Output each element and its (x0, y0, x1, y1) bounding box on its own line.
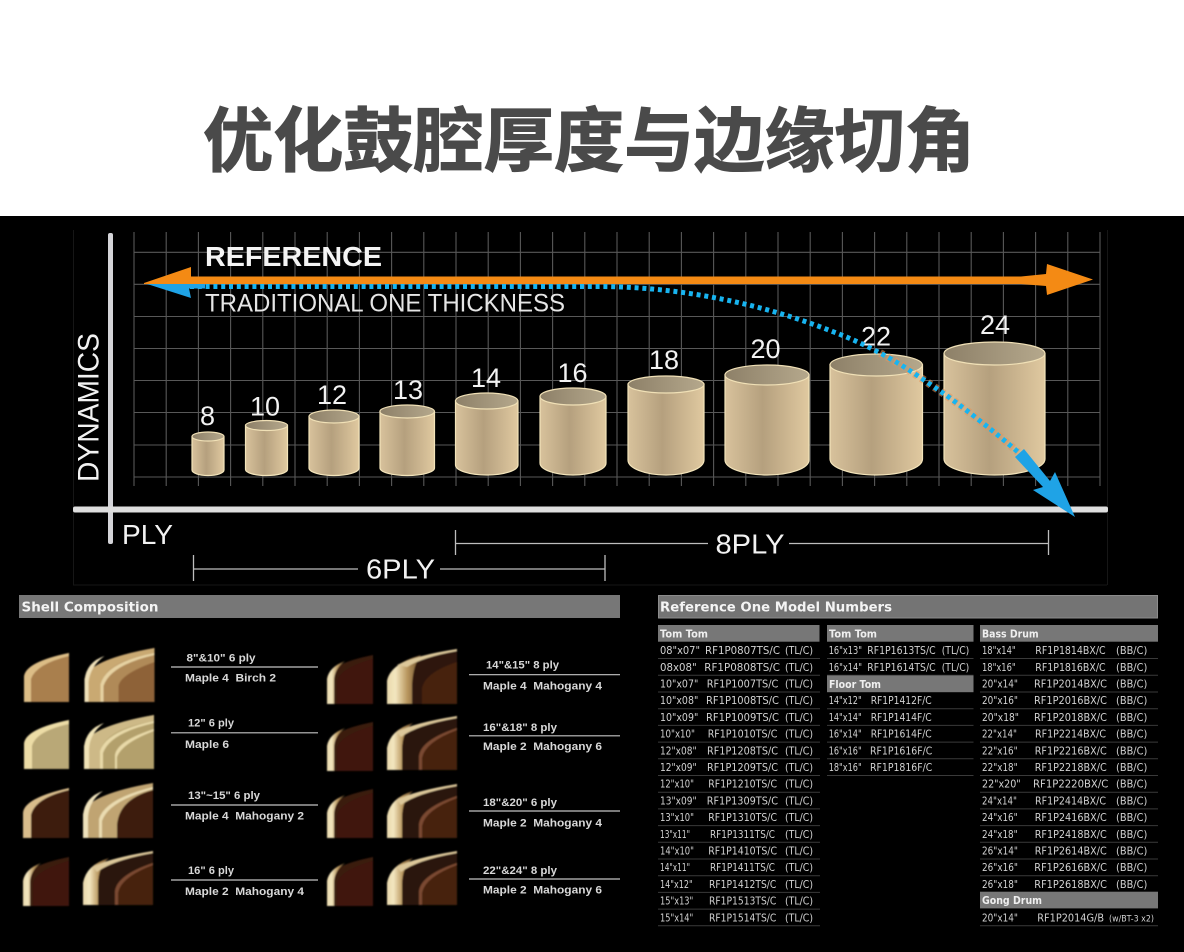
axis: dynamics (108, 233, 113, 544)
table column: tom tom sizes 08 to 15: RF1P1209TS/C (707, 762, 778, 774)
table column: tom tom sizes 08 to 15: 14"x11" (660, 862, 690, 874)
table column: tom tom sizes 08 to 15: RF1P1411TS/C (710, 862, 775, 874)
drum 18 (628, 345, 704, 475)
shell label: 16 and 18 inch: Maple 2 Mahogany 6 (483, 741, 602, 753)
table column: tom tom sizes 08 to 15: (TL/C) (785, 712, 813, 724)
table column: tom tom sizes 08 to 15: 13"x11" (660, 829, 690, 841)
table column: bass drum and gong drum: 26"x18" (982, 879, 1018, 891)
table column: tom tom sizes 08 to 15: RF1P1210TS/C (708, 779, 777, 791)
table column: tom tom sizes 08 to 15 (658, 625, 820, 926)
table column: tom tom 16 and floor tom: RF1P1414F/C (871, 712, 932, 724)
table column: bass drum and gong drum: 22"x16" (982, 745, 1018, 757)
table column: tom tom 16 and floor tom: 16"x14" (829, 662, 862, 674)
table column: bass drum and gong drum: (BB/C) (1116, 795, 1147, 807)
table column: tom tom 16 and floor tom: Floor Tom (829, 678, 881, 691)
shell thumbnails: 8 and 10 inch (24, 648, 154, 702)
table column: tom tom sizes 08 to 15: 10"x08" (660, 695, 698, 707)
table column: tom tom 16 and floor tom: 16"x16" (829, 745, 862, 757)
table column: tom tom sizes 08 to 15: 12"x08" (660, 745, 697, 757)
table column: bass drum and gong drum: 24"x14" (982, 795, 1017, 807)
drum 24: 24 (980, 310, 1010, 340)
shell thumbnails: 18 and 20 inch (327, 784, 457, 838)
table column: bass drum and gong drum: (BB/C) (1116, 879, 1147, 891)
table column: tom tom sizes 08 to 15: RF1P1208TS/C (707, 745, 778, 757)
table column: tom tom 16 and floor tom: RF1P1613TS/C (867, 645, 936, 657)
table column: bass drum and gong drum: (BB/C) (1116, 729, 1147, 741)
table column: bass drum and gong drum: (BB/C) (1116, 862, 1147, 874)
table column: tom tom sizes 08 to 15: RF1P1410TS/C (708, 846, 777, 858)
table column: bass drum and gong drum: 24"x16" (982, 812, 1018, 824)
table column: bass drum and gong drum: RF1P2016BX/C (1034, 695, 1107, 707)
table column: tom tom sizes 08 to 15: RF1P1311TS/C (710, 829, 775, 841)
table column: bass drum and gong drum: (BB/C) (1116, 712, 1147, 724)
shell label: 13 to 15 inch: Maple 4 Mahogany 2 (185, 810, 304, 822)
drum 14 (456, 363, 518, 475)
heading bar: model numbers: Reference One Model Numbers (660, 600, 892, 616)
chart: dynamics by ply (72, 230, 1108, 585)
table column: tom tom sizes 08 to 15: 10"x07" (660, 678, 698, 690)
table column: tom tom 16 and floor tom (827, 625, 974, 776)
shell label: 16 inch: 16" 6 ply (188, 865, 235, 877)
panel: shell composition (19, 595, 620, 906)
title: 优化鼓腔厚度与边缘切角 (203, 102, 975, 180)
shell label: 13 to 15 inch (171, 790, 318, 822)
table column: tom tom sizes 08 to 15: 15"x14" (660, 912, 693, 924)
shell thumbnails: 16 and 18 inch (327, 716, 457, 771)
table column: bass drum and gong drum: RF1P2214BX/C (1035, 729, 1106, 741)
shell label: 12 inch: 12" 6 ply (188, 718, 235, 730)
table column: bass drum and gong drum: (BB/C) (1116, 695, 1147, 707)
table column: bass drum and gong drum: Bass Drum (982, 628, 1039, 640)
table column: tom tom 16 and floor tom: (TL/C) (942, 662, 969, 674)
table column: tom tom sizes 08 to 15: RF1P1513TS/C (709, 896, 776, 908)
shell label: 12 inch: Maple 6 (185, 739, 229, 751)
table column: bass drum and gong drum: RF1P2414BX/C (1035, 795, 1106, 807)
table column: tom tom 16 and floor tom: 18"x16" (829, 762, 862, 774)
table column: tom tom 16 and floor tom: RF1P1816F/C (870, 762, 932, 774)
table column: tom tom sizes 08 to 15: (TL/C) (785, 762, 813, 774)
table column: tom tom sizes 08 to 15: 14"x12" (660, 879, 693, 891)
drum 14: 14 (471, 363, 501, 393)
drum 12 (309, 380, 359, 476)
table column: bass drum and gong drum: 22"x14" (982, 729, 1017, 741)
drum 20 (725, 334, 809, 475)
shell label: 16 and 18 inch: 16"&18" 8 ply (483, 722, 558, 734)
shell label: 14 and 15 inch: Maple 4 Mahogany 4 (483, 680, 603, 692)
arrow: traditional one thickness falling curve (144, 283, 1075, 517)
drum 12: 12 (317, 380, 347, 410)
table column: tom tom sizes 08 to 15: 13"x10" (660, 812, 694, 824)
shell thumbnails: 22 and 24 inch (327, 851, 457, 906)
table column: bass drum and gong drum: RF1P2614BX/C (1035, 846, 1107, 858)
drum 8: 8 (200, 401, 215, 431)
table column: tom tom sizes 08 to 15: (TL/C) (785, 662, 813, 674)
table column: tom tom sizes 08 to 15: (TL/C) (785, 729, 813, 741)
table column: tom tom sizes 08 to 15: 15"x13" (660, 896, 693, 908)
table column: tom tom sizes 08 to 15: RF1P0807TS/C (705, 645, 780, 657)
table column: tom tom sizes 08 to 15: (TL/C) (785, 896, 813, 908)
table column: bass drum and gong drum: (BB/C) (1116, 762, 1147, 774)
table column: tom tom sizes 08 to 15: RF1P0808TS/C (704, 662, 780, 674)
table column: tom tom sizes 08 to 15: 12"x09" (660, 762, 697, 774)
table column: bass drum and gong drum: 20"x14" (982, 912, 1018, 924)
drum 13 (380, 375, 435, 476)
table column: bass drum and gong drum: 18"x16" (982, 662, 1016, 674)
shell label: 16 inch (171, 865, 318, 898)
shell label: 13 to 15 inch: 13"~15" 6 ply (188, 790, 261, 802)
table column: tom tom sizes 08 to 15: RF1P1310TS/C (708, 812, 777, 824)
table column: bass drum and gong drum: RF1P2218BX/C (1035, 762, 1107, 774)
table column: bass drum and gong drum: 18"x14" (982, 645, 1016, 657)
shell label: 16 and 18 inch (469, 722, 620, 753)
shell thumbnails: 16 inch (23, 851, 153, 906)
shell thumbnails: 12 inch (24, 715, 154, 769)
table column: tom tom sizes 08 to 15: (TL/C) (785, 779, 813, 791)
table column: tom tom sizes 08 to 15: RF1P1008TS/C (706, 695, 779, 707)
table column: tom tom sizes 08 to 15: Tom Tom (660, 628, 708, 640)
bracket: 6 ply (194, 554, 605, 584)
shell label: 18 and 20 inch (469, 797, 620, 830)
table column: bass drum and gong drum: RF1P2018BX/C (1034, 712, 1107, 724)
table column: bass drum and gong drum: RF1P2216BX/C (1035, 745, 1107, 757)
table column: bass drum and gong drum: 24"x18" (982, 829, 1018, 841)
table column: bass drum and gong drum: RF1P2014G/B (1037, 912, 1104, 924)
drum 8 (192, 401, 224, 476)
table column: tom tom sizes 08 to 15: (TL/C) (785, 745, 813, 757)
axis label: ply: PLY (122, 519, 173, 550)
label: reference: REFERENCE (205, 241, 382, 272)
table column: bass drum and gong drum: (BB/C) (1116, 829, 1147, 841)
shell label: 14 and 15 inch (469, 660, 620, 692)
table column: bass drum and gong drum: (BB/C) (1116, 846, 1147, 858)
drum 10 (246, 392, 288, 476)
drum 22 (830, 322, 922, 475)
table column: tom tom 16 and floor tom: (TL/C) (942, 645, 969, 657)
shell label: 22 and 24 inch (469, 865, 620, 896)
axis: ply (73, 506, 1108, 512)
table column: tom tom sizes 08 to 15: (TL/C) (785, 862, 813, 874)
table column: tom tom sizes 08 to 15: (TL/C) (785, 678, 813, 690)
shell label: 16 inch: Maple 2 Mahogany 4 (185, 886, 305, 898)
table column: tom tom sizes 08 to 15: RF1P1514TS/C (709, 912, 776, 924)
table column: bass drum and gong drum: RF1P2618BX/C (1034, 879, 1107, 891)
arrow: reference flat response (144, 264, 1093, 295)
table column: bass drum and gong drum: (BB/C) (1116, 812, 1147, 824)
table column: tom tom sizes 08 to 15: RF1P1412TS/C (709, 879, 776, 891)
shell label: 8 and 10 inch: 8"&10" 6 ply (186, 652, 256, 664)
table column: bass drum and gong drum: 20"x18" (982, 712, 1019, 724)
drum 22: 22 (861, 322, 891, 352)
table column: bass drum and gong drum: 26"x16" (982, 862, 1018, 874)
table column: tom tom sizes 08 to 15: RF1P1007TS/C (707, 678, 778, 690)
table column: tom tom 16 and floor tom: 14"x12" (829, 695, 862, 707)
table column: tom tom sizes 08 to 15: 10"x09" (660, 712, 698, 724)
shell label: 18 and 20 inch: Maple 2 Mahogany 4 (483, 818, 603, 830)
table column: tom tom sizes 08 to 15: (TL/C) (785, 879, 813, 891)
drum 16: 16 (557, 358, 588, 388)
table column: tom tom sizes 08 to 15: 08x08" (660, 662, 697, 674)
table column: tom tom sizes 08 to 15: 12"x10" (660, 779, 694, 791)
drum 20: 20 (750, 334, 781, 364)
table column: tom tom sizes 08 to 15: (TL/C) (785, 829, 813, 841)
axis label: dynamics: DYNAMICS (72, 333, 106, 482)
table column: bass drum and gong drum: RF1P2220BX/C (1033, 779, 1108, 791)
bracket: 6 ply: 6PLY (366, 554, 435, 584)
table column: tom tom sizes 08 to 15: 10"x10" (660, 729, 695, 741)
shell thumbnails: 14 and 15 inch (327, 649, 457, 704)
table column: tom tom sizes 08 to 15: RF1P1309TS/C (707, 795, 778, 807)
table column: bass drum and gong drum: RF1P2616BX/C (1034, 862, 1107, 874)
table column: bass drum and gong drum: (w/BT-3 x2) (1109, 914, 1154, 924)
table column: tom tom 16 and floor tom: 16"x13" (829, 645, 862, 657)
label: traditional one thickness: TRADITIONAL ONE THICKNESS (205, 290, 565, 318)
table column: bass drum and gong drum (980, 625, 1158, 926)
table column: tom tom sizes 08 to 15: (TL/C) (785, 695, 813, 707)
drum 10: 10 (250, 392, 280, 422)
bracket: 8 ply (456, 528, 1048, 560)
table column: tom tom 16 and floor tom: RF1P1614TS/C (867, 662, 936, 674)
table column: tom tom sizes 08 to 15: (TL/C) (785, 846, 813, 858)
table column: bass drum and gong drum: 22"x18" (982, 762, 1018, 774)
table column: bass drum and gong drum: 20"x16" (982, 695, 1018, 707)
table column: tom tom sizes 08 to 15: RF1P1010TS/C (708, 729, 777, 741)
table column: tom tom 16 and floor tom: 16"x14" (829, 729, 862, 741)
shell thumbnails: 13 to 15 inch (23, 783, 153, 838)
shell label: 12 inch (171, 718, 318, 751)
shell label: 8 and 10 inch (171, 652, 318, 684)
table column: tom tom sizes 08 to 15: (TL/C) (785, 795, 813, 807)
table column: bass drum and gong drum: RF1P1816BX/C (1035, 662, 1106, 674)
table column: tom tom 16 and floor tom: RF1P1614F/C (871, 729, 932, 741)
table column: bass drum and gong drum: (BB/C) (1116, 745, 1147, 757)
drum 18: 18 (649, 345, 679, 375)
shell label: 8 and 10 inch: Maple 4 Birch 2 (185, 672, 276, 684)
drum 24 (944, 310, 1045, 475)
shell label: 22 and 24 inch: 22"&24" 8 ply (483, 865, 558, 877)
table column: tom tom 16 and floor tom: RF1P1616F/C (870, 745, 932, 757)
shell label: 14 and 15 inch: 14"&15" 8 ply (486, 660, 560, 672)
heading bar: model numbers (658, 596, 1158, 618)
table column: tom tom sizes 08 to 15: 13"x09" (660, 795, 697, 807)
bracket: 8 ply: 8PLY (716, 528, 785, 560)
table column: bass drum and gong drum: RF1P2014BX/C (1034, 678, 1107, 690)
heading bar: shell composition: Shell Composition (22, 600, 158, 616)
table column: tom tom 16 and floor tom: 14"x14" (829, 712, 862, 724)
table column: bass drum and gong drum: 20"x14" (982, 678, 1018, 690)
table column: tom tom sizes 08 to 15: (TL/C) (785, 645, 813, 657)
drum 16 (540, 358, 606, 475)
table column: bass drum and gong drum: RF1P1814BX/C (1035, 645, 1106, 657)
shell label: 22 and 24 inch: Maple 2 Mahogany 6 (483, 884, 602, 896)
drum 13: 13 (393, 375, 423, 405)
table column: bass drum and gong drum: RF1P2418BX/C (1035, 829, 1107, 841)
table column: tom tom sizes 08 to 15: 14"x10" (660, 846, 694, 858)
table column: tom tom sizes 08 to 15: (TL/C) (785, 812, 813, 824)
table column: bass drum and gong drum: 26"x14" (982, 846, 1018, 858)
table column: tom tom sizes 08 to 15: (TL/C) (785, 912, 813, 924)
table column: bass drum and gong drum: (BB/C) (1116, 645, 1147, 657)
table column: bass drum and gong drum: RF1P2416BX/C (1035, 812, 1107, 824)
black content panel (0, 216, 1184, 952)
table column: bass drum and gong drum: (BB/C) (1116, 779, 1147, 791)
table column: tom tom sizes 08 to 15: RF1P1009TS/C (706, 712, 779, 724)
shell label: 18 and 20 inch: 18"&20" 6 ply (483, 797, 558, 809)
table column: bass drum and gong drum: (BB/C) (1116, 662, 1147, 674)
table column: bass drum and gong drum: Gong Drum (982, 894, 1042, 907)
heading bar: shell composition (19, 595, 620, 618)
table column: bass drum and gong drum: (BB/C) (1116, 678, 1147, 690)
table column: tom tom 16 and floor tom: Tom Tom (829, 628, 877, 640)
table column: tom tom sizes 08 to 15: 08"x07" (660, 645, 700, 657)
table column: bass drum and gong drum: 22"x20" (982, 779, 1021, 791)
table column: tom tom 16 and floor tom: RF1P1412F/C (871, 695, 932, 707)
panel: reference one model numbers (658, 596, 1158, 926)
